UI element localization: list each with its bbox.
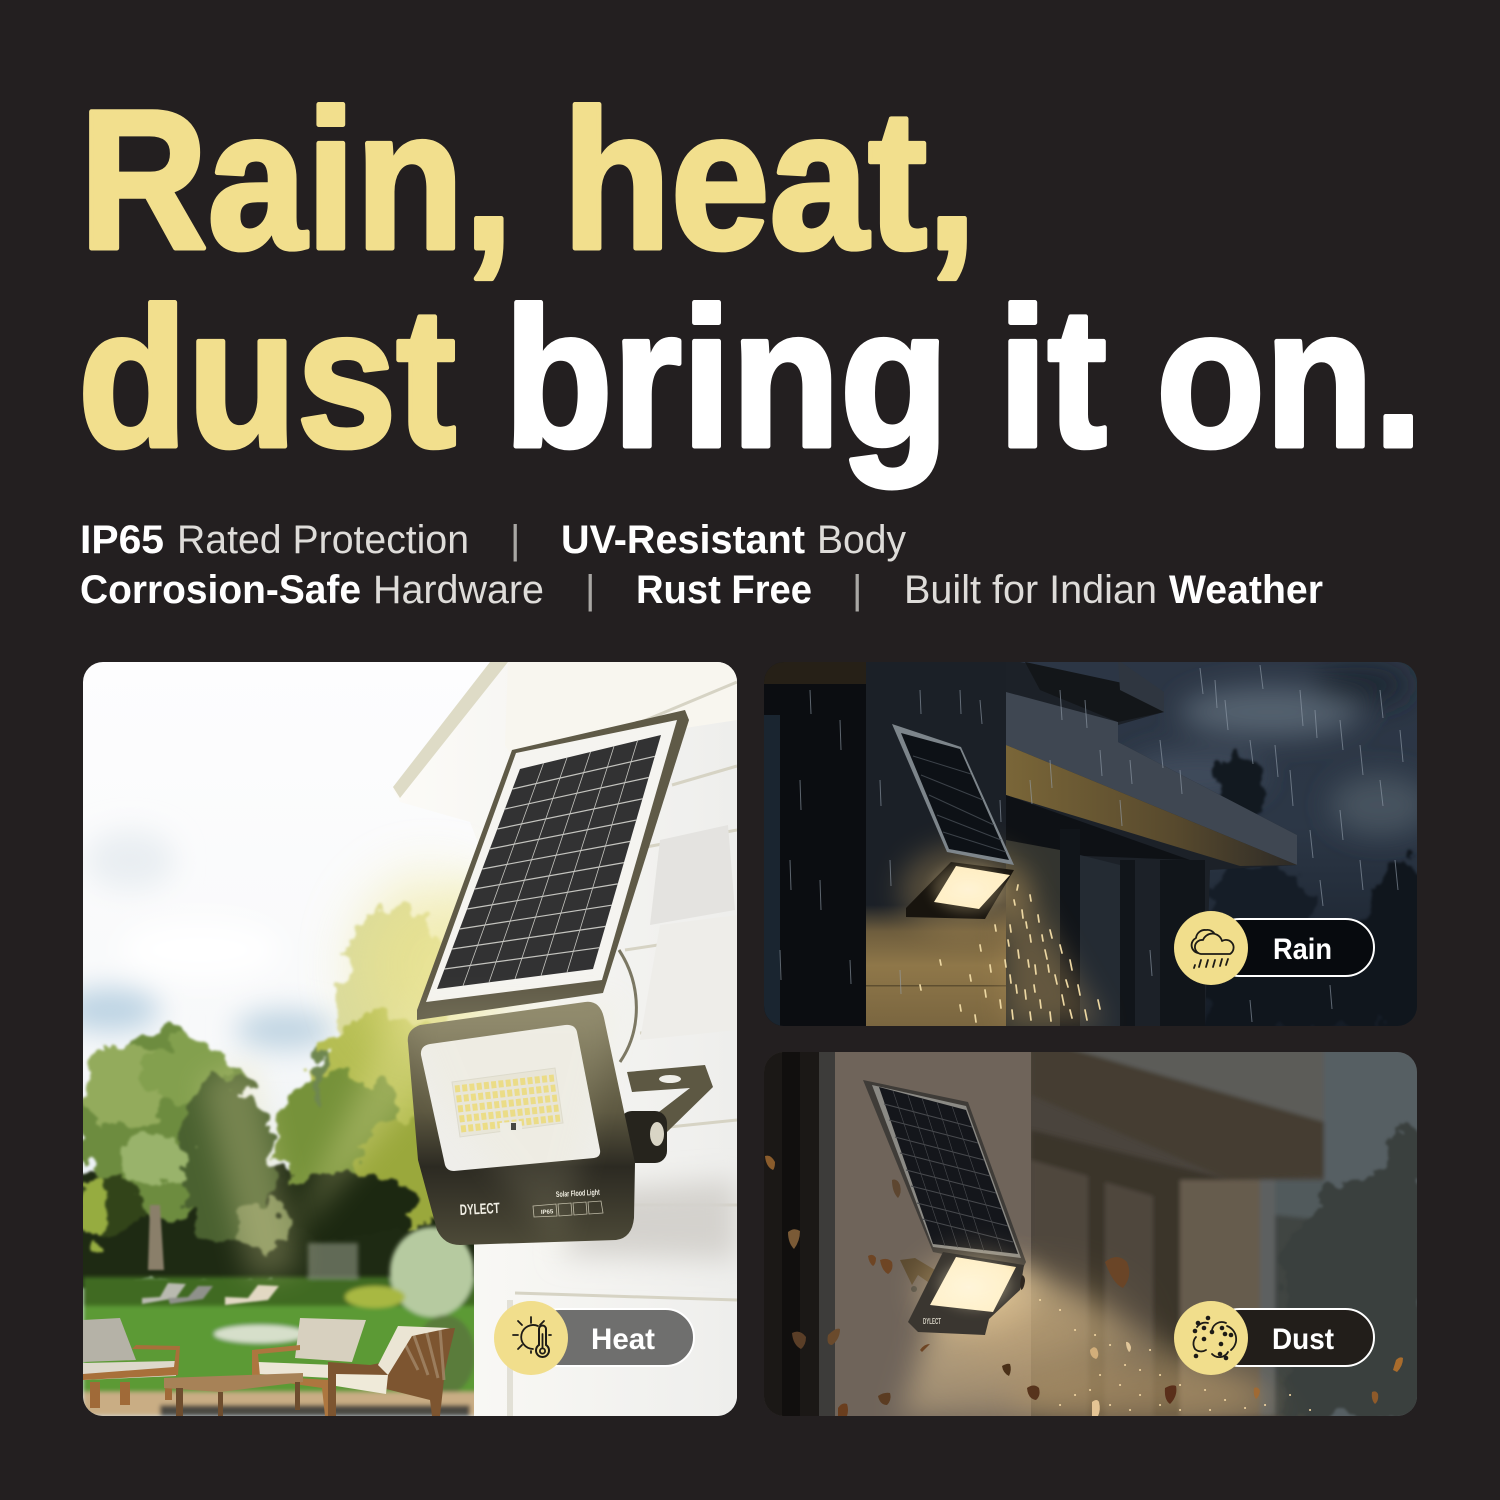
icon: sun and thermometer xyxy=(513,1317,551,1357)
icon: dust particles xyxy=(1193,1316,1236,1360)
feature list: UV-Resistant xyxy=(561,518,805,562)
solar panel xyxy=(892,724,1014,865)
badge: dust xyxy=(1174,1301,1374,1375)
lit rain drops xyxy=(920,885,1100,1022)
tree trunk xyxy=(148,1205,164,1270)
feature list: | xyxy=(585,568,595,612)
device labels: IP65 xyxy=(541,1209,554,1216)
badge: heat xyxy=(494,1301,694,1375)
blowing leaves xyxy=(765,1156,1403,1416)
rain streaks xyxy=(780,665,1403,1022)
badge: rain xyxy=(1174,911,1374,985)
white house wall and roof xyxy=(393,662,737,1416)
distant loungers xyxy=(142,1283,279,1305)
badge: dust: Dust xyxy=(1272,1323,1334,1356)
dark column and wall xyxy=(764,662,1006,1026)
floodlight xyxy=(408,1002,713,1245)
panel: rain xyxy=(764,660,1440,1040)
device labels xyxy=(460,1189,600,1215)
device labels: DYLECT xyxy=(459,1200,500,1219)
title: bring it on. xyxy=(504,267,1423,488)
panel: dust xyxy=(764,1045,1425,1425)
night sky xyxy=(1020,662,1417,1026)
infographic canvas xyxy=(82,102,1417,1416)
adjustment knob xyxy=(620,1111,667,1163)
lens xyxy=(421,1025,600,1171)
feature list: Corrosion-Safe xyxy=(80,568,361,612)
feature list: | xyxy=(852,568,862,612)
feature list: Hardware xyxy=(373,568,544,612)
feature list xyxy=(80,518,1323,612)
feature list: Built for Indian xyxy=(904,568,1157,612)
feature list: Rated Protection xyxy=(177,518,469,562)
title: dust xyxy=(78,267,456,488)
feature list: IP65 xyxy=(80,518,164,562)
feature list: Weather xyxy=(1169,568,1323,612)
light beam xyxy=(900,1265,1300,1425)
LED plate xyxy=(452,1068,563,1137)
floodlight xyxy=(906,862,1014,919)
light haze over floodlight xyxy=(417,1000,606,1234)
feature list: Rust Free xyxy=(636,568,812,612)
housing xyxy=(408,1002,635,1245)
light glow xyxy=(1005,875,1105,1026)
feature list: | xyxy=(510,518,520,562)
device labels: Solar Flood Light xyxy=(556,1188,600,1199)
hedge and lawn xyxy=(83,1227,483,1416)
solar panel xyxy=(417,710,689,1020)
icon: cloud and rain xyxy=(1192,930,1234,968)
bracket and floodlight: DYLECT xyxy=(923,1317,941,1326)
feature list: Body xyxy=(817,518,906,562)
title xyxy=(78,69,1423,488)
building xyxy=(1006,660,1297,1026)
title: Rain, heat, xyxy=(80,69,976,290)
evening wall backdrop xyxy=(764,1045,1425,1425)
bracket and floodlight xyxy=(900,1250,1035,1335)
patio furniture xyxy=(83,1318,455,1416)
garden photo backdrop xyxy=(60,662,737,1416)
dust particles xyxy=(1040,1300,1310,1410)
mounting bracket xyxy=(627,1065,713,1132)
cable xyxy=(619,950,636,1062)
panel: heat xyxy=(60,662,737,1416)
trees xyxy=(1205,748,1417,1026)
badge: rain: Rain xyxy=(1273,933,1332,966)
sun glow xyxy=(200,860,500,1280)
solar panel xyxy=(863,1080,1026,1270)
badge: heat: Heat xyxy=(591,1323,655,1356)
